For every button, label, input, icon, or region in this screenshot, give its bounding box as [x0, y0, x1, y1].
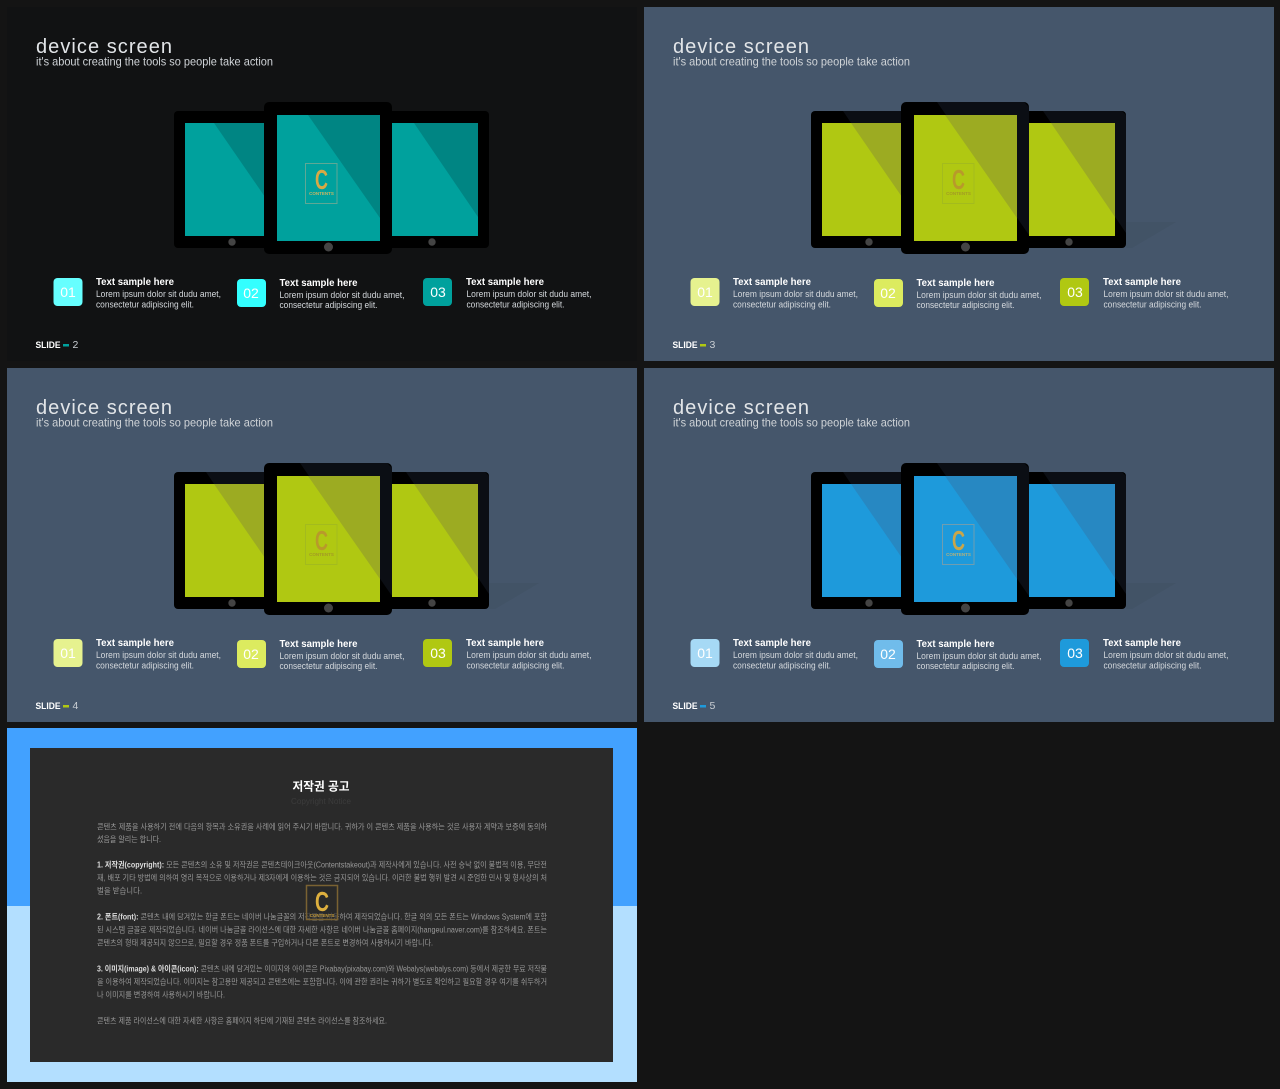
item 02: Text sample here: [280, 277, 358, 289]
item 02: Lorem ipsum dolor sit dudu amet,: [916, 290, 1042, 300]
item 01: Lorem ipsum dolor sit dudu amet,: [96, 650, 221, 660]
logo: [942, 524, 974, 564]
logo: C: [315, 164, 328, 195]
logo: C: [315, 886, 329, 917]
section 1: copyright: [97, 860, 547, 896]
section 3: image and icon: 을 이용하여 제작되었습니다. 이미지는 참고용만 제공되고 콘텐츠에는 포함합니다. 이에 관한 권리는 귀하가 별도로 확인하고 필요할 경우 여기를 쉬두하거: [97, 976, 547, 986]
item 02: Text sample here: [916, 638, 995, 650]
slide number: [36, 700, 78, 712]
title: device screen: [673, 36, 809, 58]
item 02: 02: [243, 646, 259, 662]
section 1: copyright: 벌을 받습니다.: [97, 886, 142, 896]
panel: slide 2 teal on black: [7, 7, 637, 361]
intro paragraph: [97, 822, 548, 844]
panel: slide 4 lime on slate: [7, 368, 637, 722]
item 03: [1060, 276, 1228, 310]
title: device screen: [36, 397, 172, 419]
logo: [306, 886, 338, 920]
subtitle: it's about creating the tools so people take action: [36, 416, 273, 430]
item 01: [690, 276, 858, 310]
item 02: consectetur adipiscing elit.: [916, 661, 1014, 671]
device group: three tablets: [174, 102, 489, 254]
logo: CONTENTS: [310, 913, 334, 918]
item 01: Text sample here: [733, 637, 811, 649]
logo: CONTENTS: [309, 552, 334, 557]
item 02: Text sample here: [916, 277, 995, 289]
title: device screen: [673, 397, 809, 419]
section 2: font: 2. 폰트(font): 콘텐츠 내에 담겨있는 한글 폰트는 네이버 나눔글꼴의 저작물을 사용하여 제작되었습니다. 한글 외의 모든 폰트는 Windows System에 포함: [97, 912, 548, 922]
logo: C: [315, 525, 328, 556]
item 01: 01: [60, 645, 76, 661]
logo: [942, 164, 974, 204]
section 2: font: [97, 912, 548, 948]
item 01: Lorem ipsum dolor sit dudu amet,: [733, 289, 858, 299]
item 02: consectetur adipiscing elit.: [916, 300, 1014, 310]
copyright heading: 저작권 공고: [292, 778, 350, 794]
device group: three tablets: [811, 463, 1176, 615]
item 01: consectetur adipiscing elit.: [733, 660, 831, 670]
item 01: [54, 637, 221, 670]
subtitle: it's about creating the tools so people take action: [673, 54, 910, 68]
section 3: image and icon: 나 이미지를 변경하여 사용하시기 바랍니다.: [97, 990, 225, 1000]
section 1: copyright: 재, 배포 기타 방법에 의하여 영리 목적으로 이용하거나 제3자에게 이용하는 것은 금지되어 있습니다. 이러한 불법 행위 발견 시 준엄한 민사 및 형사상의 처: [97, 872, 547, 882]
intro paragraph: 셨음을 알리는 합니다.: [97, 834, 161, 844]
logo: C: [952, 525, 965, 556]
slide number: SLIDE: [36, 701, 60, 712]
panel: slide 5 blue on slate: [644, 368, 1274, 722]
item 01: Text sample here: [96, 637, 174, 649]
subtitle: it's about creating the tools so people take action: [36, 54, 273, 68]
logo: CONTENTS: [309, 191, 334, 196]
item 03: Lorem ipsum dolor sit dudu amet,: [466, 650, 592, 660]
section 1: copyright: 1. 저작권(copyright): 모든 콘텐츠의 소유 및 저작권은 콘텐츠테이크아웃(Contentstakeout)과 제작사에게 있습니다. 사전 승낙 없이 불법적 이용, 무단전: [97, 860, 547, 870]
panel: copyright notice: [7, 728, 637, 1082]
item 01: [54, 276, 221, 310]
item 01: 01: [697, 284, 713, 300]
slide number: 2: [72, 339, 78, 351]
item 02: consectetur adipiscing elit.: [280, 661, 378, 671]
item 03: Text sample here: [466, 637, 544, 649]
item 02: Lorem ipsum dolor sit dudu amet,: [280, 651, 404, 661]
item 02: [237, 277, 404, 310]
logo: CONTENTS: [946, 191, 971, 196]
item 01: 01: [60, 284, 76, 300]
slide number: 5: [710, 700, 716, 712]
section 2: font: 콘텐츠의 형태 제공되지 않으므로, 필요할 경우 정품 폰트를 구입하거나 다른 폰트로 변경하여 사용하시기 바랍니다.: [97, 938, 433, 948]
logo: C: [952, 164, 965, 195]
item 03: Text sample here: [466, 276, 544, 288]
item 03: [423, 637, 592, 670]
item 01: Lorem ipsum dolor sit dudu amet,: [733, 650, 858, 660]
item 01: consectetur adipiscing elit.: [96, 660, 194, 670]
item 03: Lorem ipsum dolor sit dudu amet,: [1104, 650, 1228, 660]
item 03: Lorem ipsum dolor sit dudu amet,: [466, 289, 592, 299]
item 01: Text sample here: [733, 276, 811, 288]
slide number: 4: [72, 700, 78, 712]
item 03: 03: [430, 284, 446, 300]
item 03: Lorem ipsum dolor sit dudu amet,: [1104, 289, 1228, 299]
item 01: Text sample here: [96, 276, 174, 288]
item 01: [690, 637, 858, 670]
item 03: consectetur adipiscing elit.: [1104, 660, 1202, 670]
section 2: font: 된 시스템 글꼴로 제작되었습니다. 네이버 나눔글꼴 라이선스에 대한 자세한 사항은 네이버 나눔글꼴 홈페이지(hangeul.naver.com)를 참조하세요. 폰트는: [97, 924, 547, 934]
section 3: image and icon: [97, 964, 547, 1000]
item 03: consectetur adipiscing elit.: [1104, 300, 1202, 310]
slide number: SLIDE: [672, 340, 698, 351]
item 01: consectetur adipiscing elit.: [733, 300, 831, 310]
slide number: [672, 700, 716, 712]
logo: [306, 164, 337, 204]
item 03: Text sample here: [1103, 276, 1181, 288]
item 03: 03: [430, 645, 446, 661]
item 02: consectetur adipiscing elit.: [280, 300, 378, 310]
item 01: 01: [697, 645, 713, 661]
item 03: 03: [1067, 284, 1083, 300]
title: device screen: [36, 36, 172, 58]
logo: CONTENTS: [946, 552, 971, 557]
device group: three tablets: [811, 102, 1176, 254]
item 03: consectetur adipiscing elit.: [466, 300, 564, 310]
item 02: 02: [243, 285, 259, 301]
item 03: consectetur adipiscing elit.: [466, 660, 564, 670]
copyright subheading: Copyright Notice: [291, 796, 351, 806]
intro paragraph: 콘텐츠 제품을 사용하기 전에 다음의 항목과 소유권을 사례에 읽어 주시기 바랍니다. 귀하가 이 콘텐츠 제품을 사용하는 것은 사용자 계약과 보증에 동의하: [97, 822, 548, 832]
item 02: [237, 638, 404, 671]
section 3: image and icon: 3. 이미지(image) & 아이콘(icon): 콘텐츠 내에 담겨있는 이미지와 아이콘은 Pixabay(pixabay.com)와 Webalys(webalys.com) 등에서 제공한 무료 저작물: [97, 964, 547, 974]
item 02: 02: [880, 285, 896, 301]
slide number: [672, 339, 716, 351]
item 03: [1060, 637, 1228, 670]
item 01: consectetur adipiscing elit.: [96, 300, 194, 310]
item 02: 02: [880, 646, 896, 662]
slide number: SLIDE: [36, 340, 60, 351]
panel: slide 3 lime on slate: [644, 7, 1274, 361]
item 03: [423, 276, 592, 310]
slide number: 3: [710, 339, 716, 351]
item 02: Lorem ipsum dolor sit dudu amet,: [280, 290, 404, 300]
device group: three tablets: [174, 463, 539, 615]
item 02: Lorem ipsum dolor sit dudu amet,: [916, 651, 1042, 661]
item 02: [874, 277, 1042, 310]
item 03: Text sample here: [1103, 637, 1181, 649]
item 02: [874, 638, 1042, 671]
slide number: SLIDE: [672, 701, 698, 712]
subtitle: it's about creating the tools so people take action: [673, 416, 910, 430]
closing line: 콘텐츠 제품 라이선스에 대한 자세한 사항은 홈페이지 하단에 기재된 콘텐츠 라이선스를 참조하세요.: [97, 1016, 387, 1026]
logo: [306, 524, 337, 564]
item 01: Lorem ipsum dolor sit dudu amet,: [96, 289, 221, 299]
item 02: Text sample here: [280, 638, 358, 650]
slide number: [36, 339, 78, 351]
item 03: 03: [1067, 645, 1083, 661]
